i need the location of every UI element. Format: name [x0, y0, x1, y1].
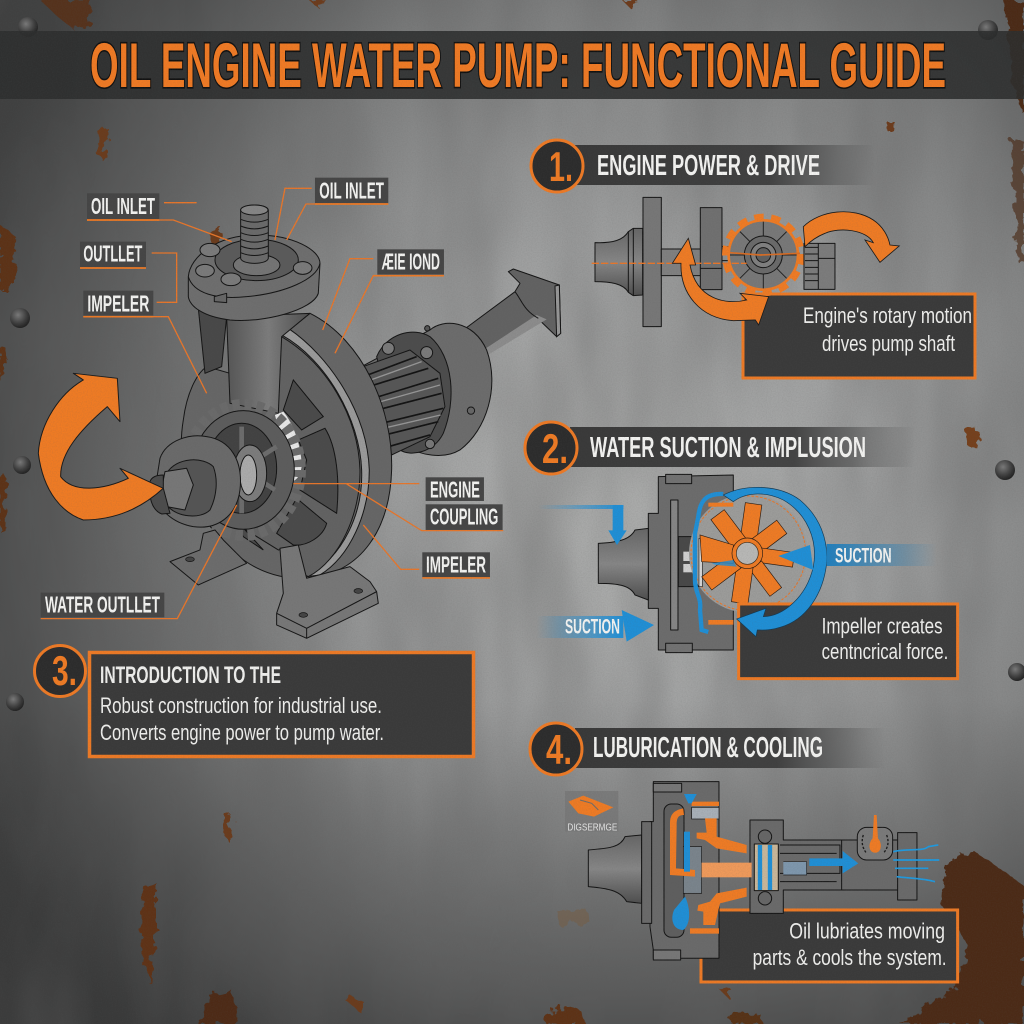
label: impeller right: IMPELER — [426, 552, 486, 578]
header bar: 1. — [549, 143, 573, 190]
water arrow top left — [538, 505, 627, 545]
gear — [187, 405, 300, 535]
white highlight behind gear — [275, 412, 302, 482]
label: impeller left — [83, 291, 153, 317]
section 4: lubrication and cooling — [530, 723, 958, 982]
header bar — [531, 140, 875, 192]
threaded stud — [241, 205, 268, 263]
suction arrow bottom left — [537, 610, 654, 642]
impeller — [700, 503, 795, 604]
hub and nut — [150, 436, 240, 527]
leader lines — [41, 188, 503, 619]
callout: drives pump shaft — [822, 331, 955, 356]
blue cooling lines — [893, 845, 939, 882]
top flange — [188, 235, 320, 320]
suction arrow bottom left: SUCTION — [565, 614, 620, 638]
label: eie iond: ÆIE IOND — [382, 248, 440, 274]
callout: Engine's rotary motion — [803, 303, 972, 328]
callout — [701, 910, 958, 982]
title banner — [0, 31, 1024, 101]
callout: centncrical force. — [822, 639, 948, 664]
callout: parts & cools the system. — [753, 945, 947, 970]
main pump illustration — [38, 177, 561, 638]
callout — [743, 294, 975, 378]
header bar: 4. — [546, 726, 572, 773]
label: outlet — [80, 241, 146, 268]
callout — [739, 604, 958, 679]
text panel: Converts engine power to pump water. — [100, 720, 384, 745]
header bar: WATER SUCTION & IMPLUSION — [590, 432, 866, 464]
orange arrow: lower — [672, 238, 769, 325]
callout: Impeller creates — [822, 613, 943, 638]
big blue circular arrow — [723, 487, 827, 637]
gear — [726, 218, 801, 292]
label: coupling: COUPLING — [430, 504, 498, 530]
suction arrow right — [778, 544, 937, 570]
badge 3 — [34, 646, 86, 696]
label: oil inlet top: OIL INLET — [319, 177, 384, 203]
volute window openings — [230, 380, 338, 550]
header bar: LUBURICATION & COOLING — [593, 732, 823, 764]
header bar — [525, 422, 915, 474]
text panel: INTRODUCTION TO THE — [100, 662, 281, 689]
label: engine: ENGINE — [430, 476, 480, 502]
label: water outlet — [41, 591, 164, 617]
feet — [170, 530, 247, 585]
flange bolts — [196, 243, 312, 286]
label: oil inlet left: OIL INLET — [91, 193, 155, 219]
label: oil inlet top — [315, 177, 388, 204]
blue coolant passages — [672, 794, 858, 930]
text panel: Robust construction for industrial use. — [100, 693, 382, 718]
label: impeller left: IMPELER — [87, 291, 149, 317]
blue internal channel — [695, 494, 723, 632]
label: outlet: OUTLLET — [83, 241, 142, 267]
volute housing — [181, 313, 392, 578]
header bar: 2. — [542, 425, 568, 472]
handle bracket — [463, 269, 561, 357]
bearing — [754, 844, 807, 891]
drive diagram — [592, 197, 899, 327]
badge 3: 3. — [52, 647, 77, 694]
oil drop gauge — [857, 815, 893, 860]
label: coupling — [426, 504, 503, 530]
label: oil inlet left — [87, 193, 159, 220]
orange rotation arrow — [38, 373, 163, 520]
section 3: introduction — [34, 646, 474, 756]
section 1: engine power and drive — [531, 140, 975, 378]
header bar — [530, 723, 885, 775]
logo: DIGSERMGE — [567, 823, 618, 834]
motor end cap and ribbed cylinder — [358, 323, 492, 456]
orange oil passages — [670, 808, 752, 925]
callout: Oil lubriates moving — [789, 918, 945, 943]
label: impeller right — [422, 552, 490, 578]
text panel — [90, 652, 474, 756]
suction arrow right: SUCTION — [835, 544, 892, 568]
pump cutaway — [588, 782, 917, 960]
header bar: ENGINE POWER & DRIVE — [597, 150, 820, 182]
rivets — [6, 17, 1024, 711]
logo — [565, 791, 618, 834]
section 2: water suction and implusion — [525, 422, 958, 679]
label: eie iond — [373, 248, 444, 276]
orange arrow: right — [803, 212, 899, 262]
neck column — [227, 313, 310, 413]
label: engine — [426, 476, 484, 502]
label: water outlet: WATER OUTLLET — [45, 591, 160, 617]
pump cross-section — [598, 474, 808, 653]
